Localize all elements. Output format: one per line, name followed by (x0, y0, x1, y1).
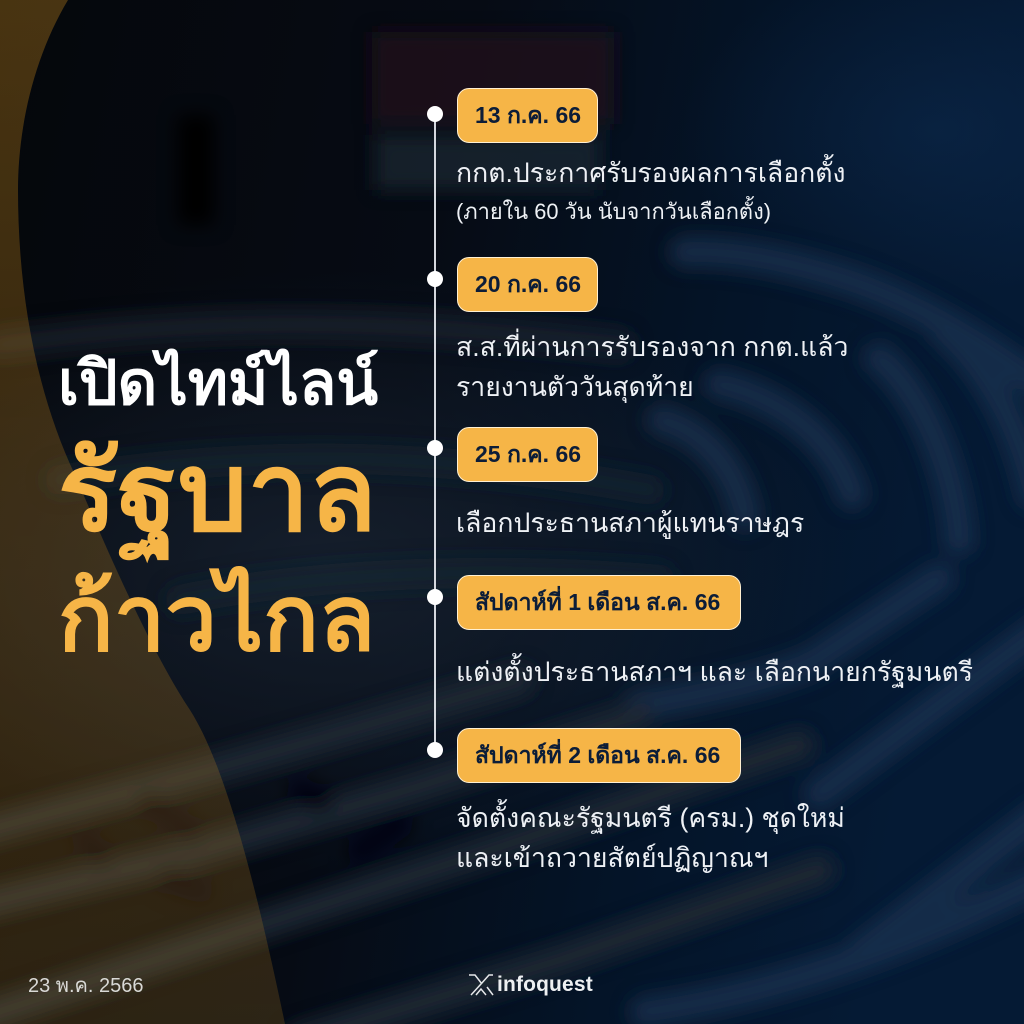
date badge 2 (457, 257, 598, 312)
amber curved panel (0, 0, 285, 1024)
date badge 4 (457, 575, 741, 630)
date badge 3 (457, 427, 598, 482)
timeline dots (427, 106, 443, 758)
title line 3: ก้าวไกล (58, 568, 375, 670)
event 1 text: (ภายใน 60 วัน นับจากวันเลือกตั้ง) (456, 199, 771, 224)
date badge 5: สัปดาห์ที่ 2 เดือน ส.ค. 66 (475, 742, 720, 768)
arcs upper right (640, 252, 1024, 1012)
event 2 text: รายงานตัววันสุดท้าย (456, 372, 694, 402)
rows across the middle (0, 324, 660, 600)
event 1 text: กกต.ประกาศรับรองผลการเลือกตั้ง (456, 158, 846, 188)
event 4 text: แต่งตั้งประธานสภาฯ และ เลือกนายกรัฐมนตรี (456, 657, 973, 687)
event 5 text: จัดตั้งคณะรัฐมนตรี (ครม.) ชุดใหม่ (456, 803, 845, 833)
date badge 3: 25 ก.ค. 66 (475, 441, 581, 467)
event 2 text (456, 328, 848, 782)
dark head silhouettes (85, 790, 400, 890)
icon: infoquest X mark (469, 974, 494, 996)
diagonal rows lower left (0, 680, 820, 1024)
event 2 text: ส.ส.ที่ผ่านการรับรองจาก กกต.แล้ว (456, 332, 848, 362)
timeline line (434, 110, 436, 750)
event 3 text: เลือกประธานสภาผู้แทนราษฎร (456, 508, 804, 538)
date badge 1: 13 ก.ค. 66 (475, 102, 581, 128)
title line 2: รัฐบาล (58, 431, 377, 554)
logo wordmark: infoquest (497, 973, 593, 996)
event 5 text: และเข้าถวายสัตย์ปฏิญาณฯ (456, 843, 768, 873)
date badge 5 (457, 728, 741, 783)
logo: infoquest (469, 973, 593, 996)
title (58, 348, 378, 670)
event 1 text (456, 154, 846, 224)
title line 1: เปิดไทม์ไลน์ (58, 349, 378, 417)
date badge 1 (457, 88, 598, 143)
date badge 2: 20 ก.ค. 66 (475, 271, 581, 297)
date stamp: 23 พ.ค. 2566 (28, 975, 144, 997)
date badge 4: สัปดาห์ที่ 1 เดือน ส.ค. 66 (475, 589, 720, 615)
timeline (427, 106, 443, 758)
event 5 text (456, 799, 845, 873)
